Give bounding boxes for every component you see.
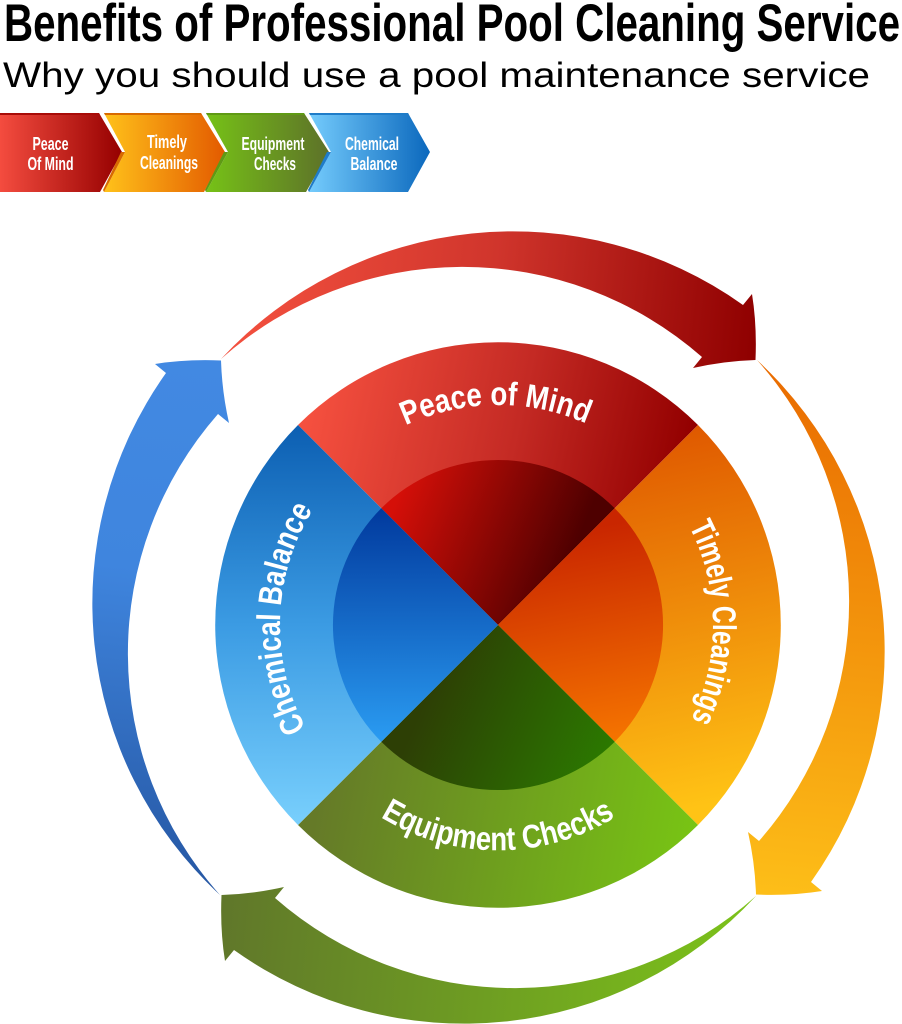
legend: chevron steps bbox=[0, 113, 430, 192]
chevron: Equipment Checks bbox=[205, 113, 329, 192]
chevron: Chemical Balance bbox=[308, 113, 430, 192]
chevron: Timely Cleanings: Timely bbox=[147, 132, 187, 152]
arrow: blue, left bbox=[92, 360, 229, 895]
segment: Timely Cleanings bbox=[498, 425, 781, 825]
chevron: Timely Cleanings: Cleanings bbox=[140, 153, 198, 173]
subtitle: Why you should use a pool maintenance service bbox=[3, 56, 870, 95]
segment: Peace of Mind bbox=[298, 342, 698, 625]
chevron: Timely Cleanings bbox=[103, 113, 225, 192]
segment: Chemical Balance bbox=[215, 425, 498, 825]
chevron: Equipment Checks: Equipment bbox=[242, 134, 305, 154]
segment: Timely Cleanings: Timely Cleanings bbox=[692, 517, 737, 724]
segment: Chemical Balance: Chemical Balance bbox=[256, 504, 310, 734]
chevron: Peace of Mind bbox=[0, 113, 122, 192]
arrow: red, top bbox=[221, 231, 756, 368]
segment: Equipment Checks bbox=[298, 625, 698, 908]
segment: Equipment Checks: Equipment Checks bbox=[382, 798, 613, 850]
arrow: green, bottom bbox=[221, 887, 756, 1024]
arrow: orange, right bbox=[748, 360, 885, 895]
chevron: Equipment Checks: Checks bbox=[254, 154, 296, 174]
circle diagram bbox=[215, 342, 781, 908]
chevron: Peace of Mind: Peace bbox=[32, 134, 68, 154]
chevron: Chemical Balance: Chemical bbox=[345, 134, 399, 154]
chevron: Peace of Mind: Of Mind bbox=[28, 154, 74, 174]
chevron: Chemical Balance: Balance bbox=[350, 154, 398, 174]
segment: Peace of Mind: Peace of Mind bbox=[398, 382, 594, 424]
